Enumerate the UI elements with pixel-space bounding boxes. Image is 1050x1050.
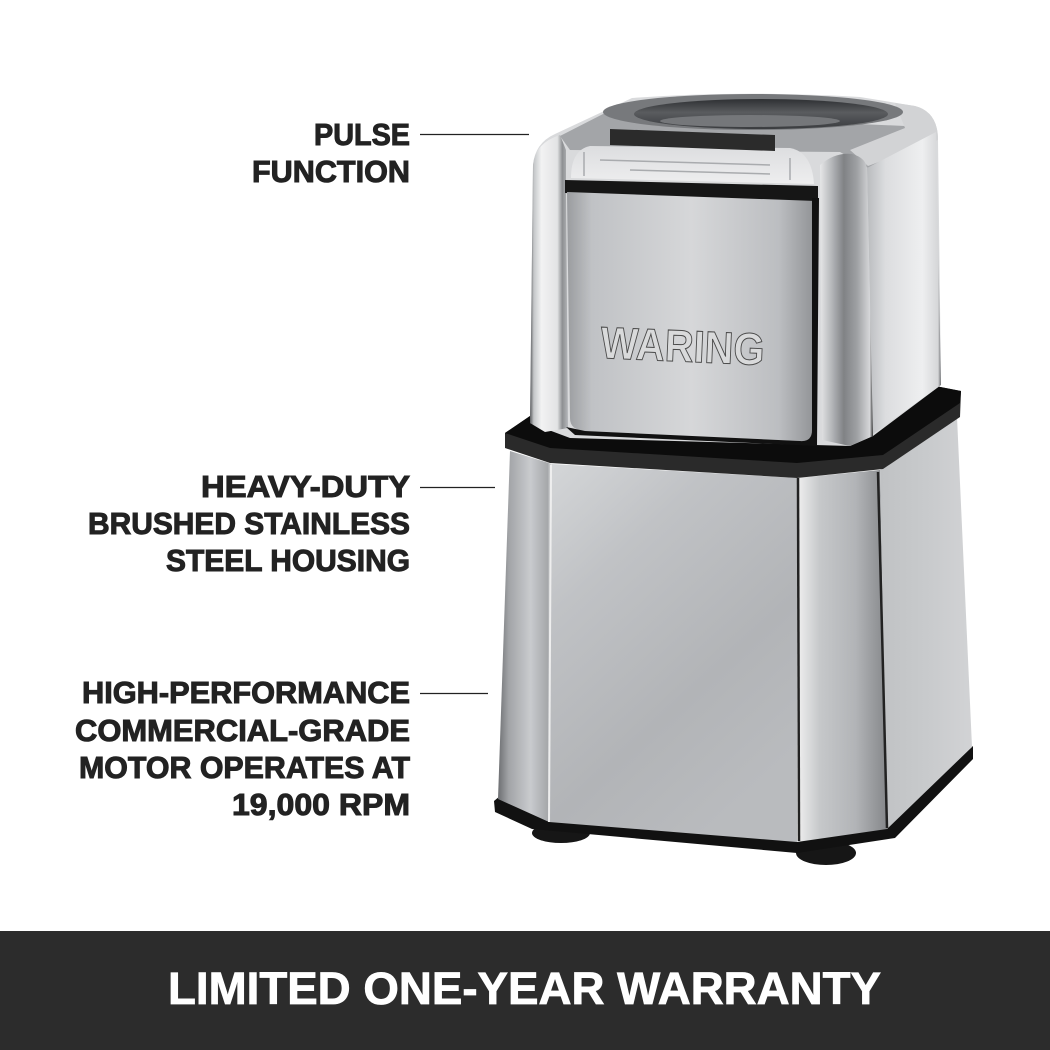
jar top shoulder bbox=[560, 113, 937, 168]
panel seams bbox=[549, 465, 887, 841]
base bottom trim bbox=[494, 746, 973, 853]
jar right clear panel bbox=[867, 132, 941, 434]
label text bbox=[252, 118, 410, 189]
label text: BRUSHED STAINLESS bbox=[88, 507, 410, 541]
label text: COMMERCIAL-GRADE bbox=[75, 714, 410, 748]
label text: HIGH-PERFORMANCE bbox=[82, 676, 410, 710]
label text: FUNCTION bbox=[252, 155, 410, 189]
base housing: front panel bbox=[549, 464, 797, 842]
leader line bbox=[420, 692, 488, 694]
product: Waring spice grinder bbox=[494, 94, 973, 865]
inner clear lid bbox=[571, 146, 814, 184]
base housing: right chamfer bbox=[797, 470, 887, 842]
jar lid ring bbox=[634, 99, 888, 129]
label text bbox=[75, 676, 410, 822]
WARING logo: WARING bbox=[600, 317, 766, 375]
leader line bbox=[420, 134, 529, 136]
base housing: left chamfer bbox=[498, 451, 552, 822]
label text: 19,000 RPM bbox=[232, 788, 410, 822]
jar corner post bbox=[820, 154, 873, 446]
collar top surface bbox=[505, 385, 961, 463]
warranty banner bbox=[0, 931, 1050, 1050]
jar top right corner highlight bbox=[850, 103, 938, 166]
callout: pulse function bbox=[252, 118, 529, 189]
base black collar bbox=[505, 385, 961, 478]
inner stainless canister bbox=[567, 192, 816, 441]
callout: motor bbox=[75, 676, 488, 822]
inner lid detail lines bbox=[584, 152, 790, 180]
label text bbox=[88, 470, 410, 578]
label text: STEEL HOUSING bbox=[166, 544, 410, 578]
clear jar outer body bbox=[530, 94, 941, 446]
base housing: right panel bbox=[880, 417, 972, 829]
leader line bbox=[420, 486, 495, 488]
callout: stainless steel housing bbox=[88, 470, 495, 578]
banner text: LIMITED ONE-YEAR WARRANTY bbox=[168, 963, 881, 1014]
jar lid centre highlight bbox=[660, 115, 840, 127]
banner background bbox=[0, 931, 1050, 1050]
canister dark edge bbox=[566, 198, 819, 446]
inner black rim bbox=[565, 180, 818, 204]
grinder feet bbox=[532, 823, 856, 865]
label text: MOTOR OPERATES AT bbox=[79, 751, 410, 785]
jar lid recess bbox=[603, 94, 903, 130]
jar left wall bbox=[530, 135, 568, 432]
label text: PULSE bbox=[314, 118, 410, 152]
label text: HEAVY-DUTY bbox=[201, 470, 410, 504]
black lid tab bbox=[610, 129, 775, 151]
